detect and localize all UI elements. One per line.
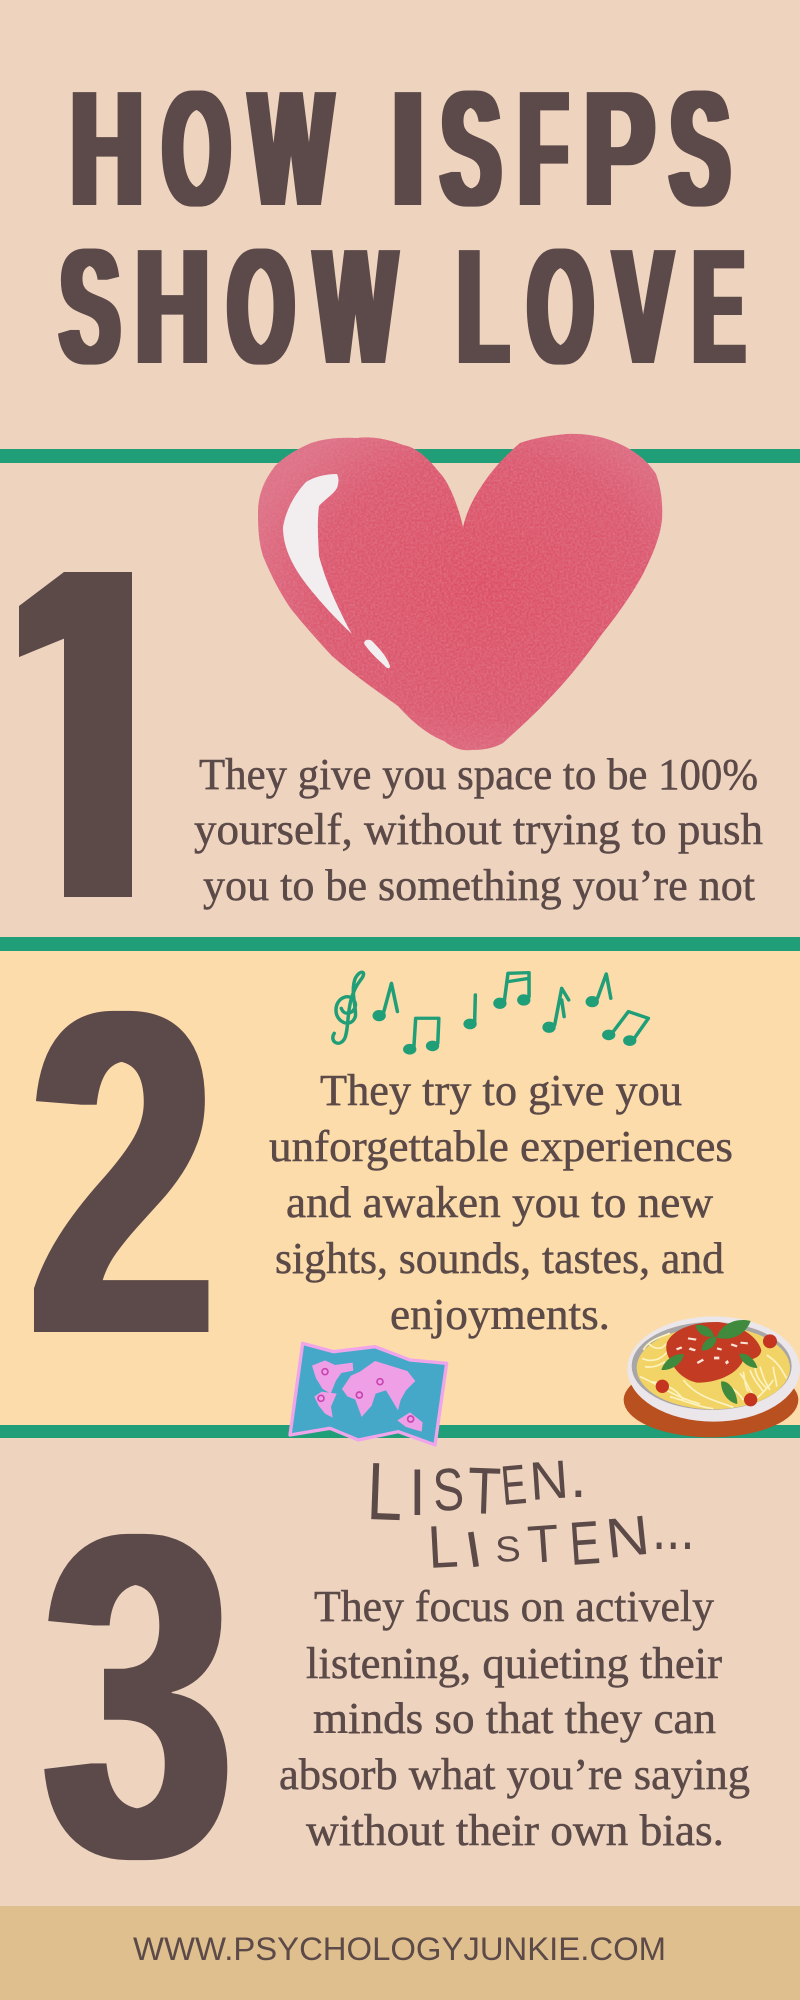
handwritten word: LISTEN. [365, 1443, 587, 1538]
text block 3 [279, 1582, 750, 1855]
handwritten word: LISTEN...: S [494, 1529, 522, 1570]
title: H [135, 214, 210, 398]
number 2: 2 [30, 915, 214, 1430]
title: O [528, 214, 593, 398]
panel: point 2 [30, 915, 800, 1445]
text block 2: and awaken you to new [286, 1178, 713, 1227]
title: S [441, 57, 501, 241]
handwritten word: LISTEN.: T [467, 1453, 502, 1528]
handwritten word: LISTEN...: T [526, 1513, 561, 1574]
text block 1: yourself, without trying to push [194, 805, 763, 854]
title: I [391, 56, 425, 240]
title: E [693, 216, 744, 399]
text block 2: sights, sounds, tastes, and [275, 1234, 724, 1283]
panel: point 1 [19, 434, 763, 910]
panel: point 3 [44, 1439, 750, 1953]
handwritten word: LISTEN.: N [528, 1449, 570, 1512]
handwritten word: LISTEN... [426, 1495, 695, 1582]
handwritten word: LISTEN.: L [365, 1446, 404, 1538]
text block 3: minds so that they can [313, 1694, 716, 1743]
text block 3: They focus on actively [314, 1582, 714, 1631]
title: P [584, 57, 655, 241]
text block 1: They give you space to be 100% [199, 750, 758, 799]
handwritten word: LISTEN.: . [570, 1443, 587, 1510]
panel: point 2 background [0, 951, 800, 1425]
title: O [163, 56, 230, 240]
heart highlight [283, 474, 352, 634]
text block 1: you to be something you’re not [203, 861, 755, 910]
handwritten word: LISTEN...: ... [652, 1495, 695, 1562]
text block 3: listening, quieting their [306, 1639, 722, 1688]
text block 2: unforgettable experiences [269, 1122, 733, 1171]
title [60, 56, 744, 399]
icon: music notes [333, 972, 648, 1055]
handwritten word: LISTEN.: I [409, 1456, 426, 1530]
title: W [250, 56, 332, 240]
icon: world map [290, 1343, 447, 1445]
title: S [670, 57, 730, 241]
text block 3: absorb what you’re saying [279, 1750, 750, 1799]
handwritten word: LISTEN...: L [426, 1513, 460, 1582]
title: H [70, 57, 143, 240]
website url: WWW.PSYCHOLOGYJUNKIE.COM [133, 1931, 666, 1967]
text block 2: enjoyments. [390, 1290, 610, 1339]
title: V [614, 214, 672, 398]
footer [0, 1906, 800, 2000]
icon: watercolor heart [258, 434, 662, 750]
title: O [228, 215, 294, 398]
text block 3: without their own bias. [306, 1806, 724, 1855]
title: S [60, 215, 120, 399]
handwritten word: LISTEN...: N [603, 1505, 652, 1570]
handwritten word: LISTEN.: E [499, 1454, 529, 1518]
number 3: 3 [44, 1439, 232, 1953]
icon: spaghetti plate [624, 1316, 800, 1437]
title: L [458, 216, 508, 398]
handwritten word: LISTEN...: E [567, 1509, 602, 1579]
handwritten word: LISTEN.: S [431, 1457, 465, 1524]
handwritten word: LISTEN...: I [461, 1520, 486, 1579]
text block 2 [269, 1066, 733, 1339]
text block 2: They try to give you [320, 1066, 682, 1115]
title: W [315, 215, 396, 398]
text block 1 [194, 750, 763, 910]
title: F [519, 57, 567, 241]
